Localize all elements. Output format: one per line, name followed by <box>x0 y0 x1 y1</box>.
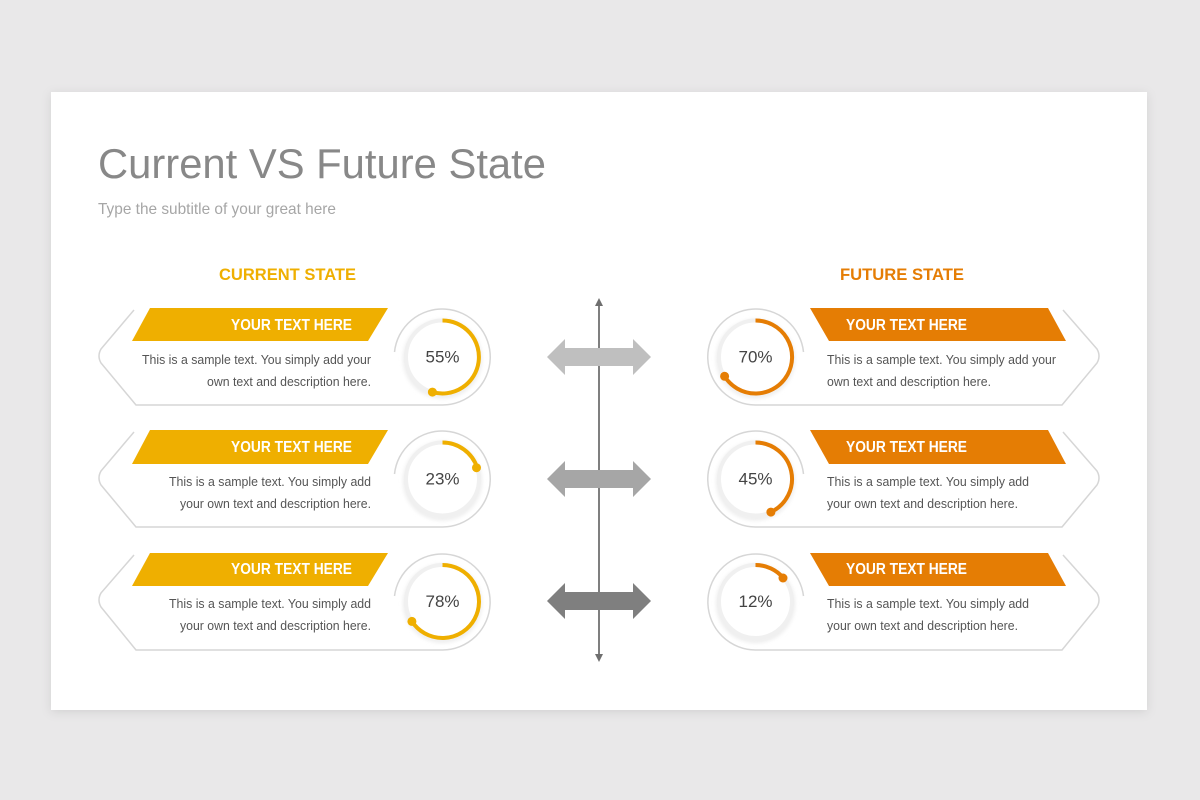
description: own text and description here. <box>827 375 991 389</box>
gauge 45% <box>718 442 792 518</box>
gauge 23%: 23% <box>425 470 460 488</box>
description: This is a sample text. You simply add your <box>142 353 371 367</box>
banner <box>132 430 388 464</box>
central vertical arrow <box>595 298 603 662</box>
banner <box>132 308 388 341</box>
banner <box>810 430 1066 464</box>
gauge 45%: 45% <box>738 470 773 488</box>
banner text: YOUR TEXT HERE <box>231 439 352 456</box>
panel outline <box>708 431 1099 527</box>
panel outline <box>708 309 1099 405</box>
gauge 70% <box>718 320 792 396</box>
banner text: YOUR TEXT HERE <box>231 317 352 334</box>
gauge 78% <box>406 565 480 640</box>
banner text: YOUR TEXT HERE <box>846 317 967 334</box>
banner text: YOUR TEXT HERE <box>846 561 967 578</box>
gauge 55% <box>406 320 480 397</box>
gauge 70%: 70% <box>738 348 773 366</box>
gauge 78%: 78% <box>425 592 460 611</box>
description: your own text and description here. <box>180 497 371 511</box>
white card <box>51 92 1147 710</box>
description: This is a sample text. You simply add <box>169 475 371 489</box>
panel outline <box>99 309 490 405</box>
description: This is a sample text. You simply add <box>827 597 1029 611</box>
panel: current state row 1 <box>99 308 490 405</box>
description: your own text and description here. <box>827 497 1018 511</box>
double arrow row 3 <box>547 583 651 619</box>
title: Current VS Future State <box>98 140 546 187</box>
subtitle: Type the subtitle of your great here <box>98 201 336 218</box>
banner <box>810 553 1066 586</box>
heading: current state: CURRENT STATE <box>219 265 356 284</box>
panel: current state row 2 <box>99 430 490 527</box>
description: This is a sample text. You simply add <box>169 597 371 611</box>
description: your own text and description here. <box>180 619 371 633</box>
double arrow row 2 <box>547 461 651 497</box>
heading: future state: FUTURE STATE <box>840 265 964 284</box>
panel: future state row 2 <box>708 430 1099 527</box>
description: This is a sample text. You simply add <box>827 475 1029 489</box>
description: This is a sample text. You simply add your <box>827 353 1056 367</box>
panel outline <box>99 554 490 650</box>
banner text: YOUR TEXT HERE <box>231 561 352 578</box>
description: own text and description here. <box>207 375 371 389</box>
panel: future state row 1 <box>708 308 1099 405</box>
gauge 55%: 55% <box>425 348 460 366</box>
banner text: YOUR TEXT HERE <box>846 439 967 456</box>
description: your own text and description here. <box>827 619 1018 633</box>
gauge 12% <box>718 565 792 640</box>
panel outline <box>99 431 490 527</box>
panel: current state row 3 <box>99 553 490 650</box>
banner <box>810 308 1066 341</box>
gauge 23% <box>406 442 481 518</box>
gauge 12%: 12% <box>738 592 773 611</box>
banner <box>132 553 388 586</box>
double arrow row 1 <box>547 339 651 375</box>
panel: future state row 3 <box>708 553 1099 650</box>
panel outline <box>708 554 1099 650</box>
